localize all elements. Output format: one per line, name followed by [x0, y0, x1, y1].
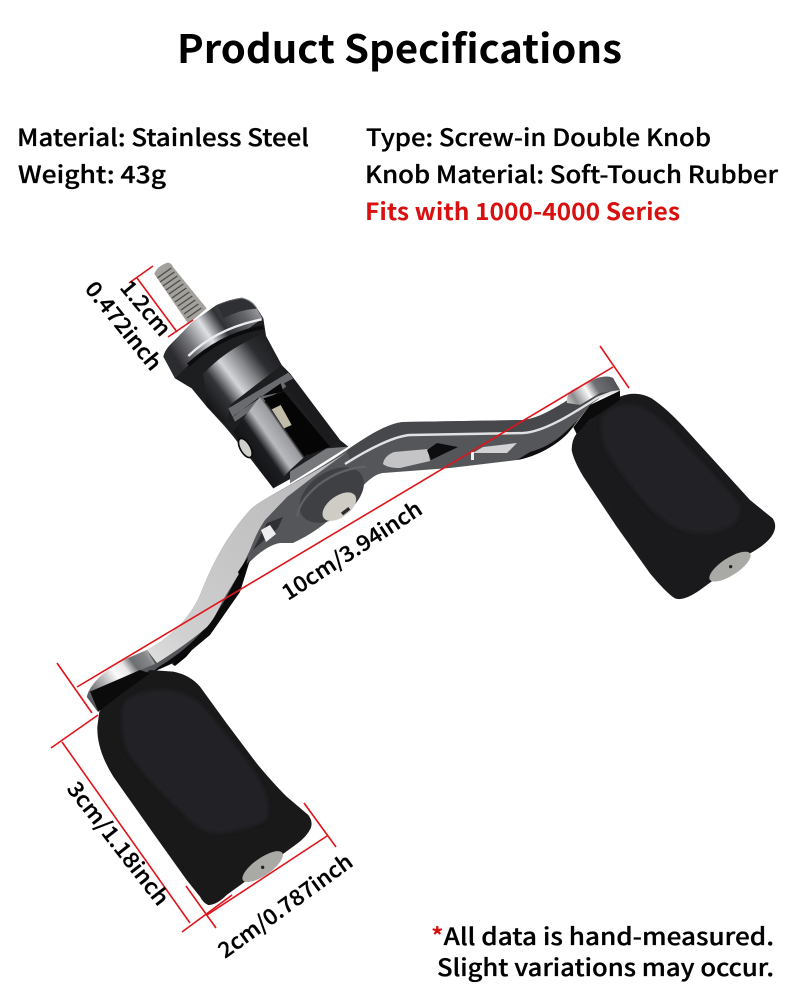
- footnote: Slight variations may occur.: [437, 949, 774, 983]
- dimension: handle length: [57, 346, 629, 713]
- dimension: thread length: [79, 266, 193, 377]
- hub post with screw thread: [154, 263, 348, 488]
- label: 3cm/1.18inch: 3cm/1.18inch: [60, 774, 177, 912]
- right knob: [572, 391, 775, 599]
- label: 2cm/0.787inch: 2cm/0.787inch: [211, 846, 359, 965]
- footnote: *All data is hand-measured.: [431, 918, 774, 952]
- spec: material: Material: Stainless Steel: [17, 119, 309, 153]
- crank arm: [87, 376, 620, 712]
- center screw disc: [289, 456, 374, 534]
- left knob: [90, 670, 312, 905]
- spec: type: Type: Screw-in Double Knob: [366, 119, 711, 153]
- end cap left: [87, 650, 155, 712]
- label: 1.2cm: 1.2cm: [114, 273, 179, 342]
- under arm dark shade: [153, 560, 250, 672]
- product illustration: double knob handle: [87, 263, 775, 905]
- dimension: knob width: [186, 803, 359, 965]
- spec: knob material: Knob Material: Soft-Touch Rubber: [365, 156, 778, 190]
- spec: fit (red): Fits with 1000-4000 Series: [365, 193, 680, 227]
- end cap right: [567, 376, 620, 405]
- dimension: knob length: [51, 715, 232, 932]
- title: Product Specifications: [177, 19, 622, 75]
- cut-outs: [383, 449, 430, 468]
- footnote: [431, 918, 774, 983]
- spec: weight: Weight: 43g: [18, 156, 166, 190]
- spec list: [17, 119, 778, 227]
- label: 0.472inch: 0.472inch: [79, 274, 170, 377]
- label: 10cm/3.94inch: 10cm/3.94inch: [275, 493, 428, 607]
